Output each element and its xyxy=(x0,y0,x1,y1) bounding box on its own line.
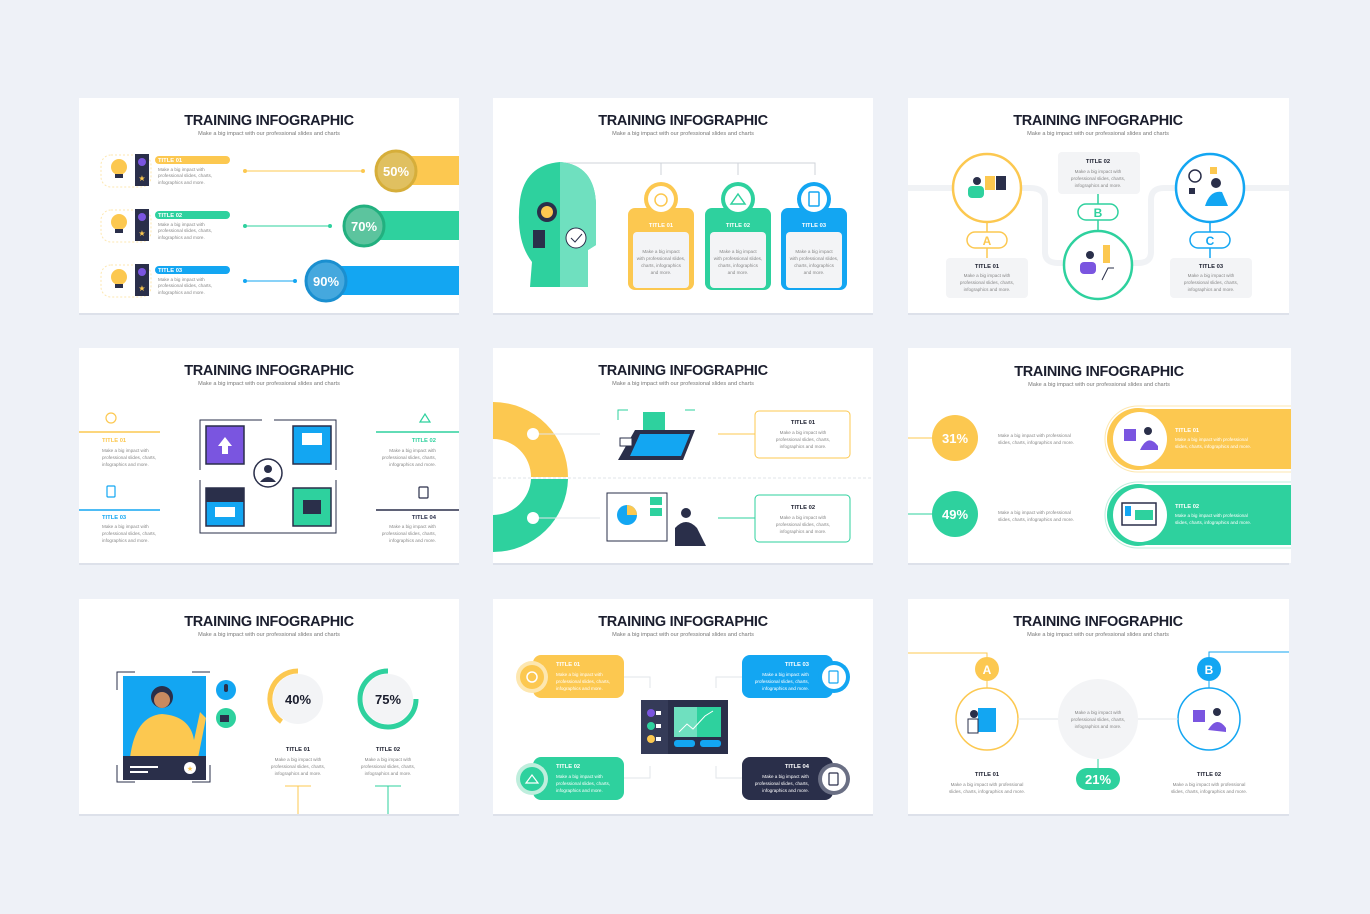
slide 8: four pills around monitor xyxy=(493,599,873,816)
text box 1 xyxy=(718,411,850,458)
title: TRAINING INFOGRAPHIC xyxy=(598,614,769,630)
side B: slides, charts, infographics and more. xyxy=(1171,789,1247,794)
title: Make a big impact with our professional slides and charts xyxy=(612,632,754,638)
center circle: 21% xyxy=(1085,772,1111,787)
title: Make a big impact with our professional slides and charts xyxy=(1028,382,1170,388)
donut 75%: professional slides, charts, xyxy=(361,764,415,769)
row 2: TITLE 02 xyxy=(158,213,182,219)
item 2: TITLE 02 xyxy=(412,438,436,444)
circle A: A xyxy=(983,234,992,248)
circle C xyxy=(1170,154,1252,298)
row 1 xyxy=(908,406,1291,472)
center circle: infographics and more. xyxy=(1075,724,1121,729)
card 3: and more. xyxy=(804,270,824,275)
circle C: Make a big impact with xyxy=(1188,273,1235,278)
card 3: with professional slides, xyxy=(790,256,838,261)
title: TRAINING INFOGRAPHIC xyxy=(1013,113,1184,129)
text box 1: Make a big impact with xyxy=(780,430,827,435)
card 3 xyxy=(781,182,847,290)
title xyxy=(1013,113,1184,137)
pill 1: infographics and more. xyxy=(556,686,603,691)
card 1 xyxy=(628,182,694,290)
pill 3 xyxy=(742,655,850,698)
row 1: Make a big impact with professional xyxy=(1175,437,1248,442)
item 1: professional slides, charts, xyxy=(102,455,156,460)
title: TRAINING INFOGRAPHIC xyxy=(598,363,769,379)
row 2: slides, charts, infographics and more. xyxy=(1175,520,1251,525)
row 2: 70% xyxy=(351,219,377,234)
pill 4: TITLE 04 xyxy=(785,764,810,770)
center circle: professional slides, charts, xyxy=(1071,717,1125,722)
card 2: Make a big impact xyxy=(719,249,757,254)
title: TRAINING INFOGRAPHIC xyxy=(184,614,355,630)
connector lines xyxy=(557,163,815,180)
center squares xyxy=(200,420,336,533)
title: TRAINING INFOGRAPHIC xyxy=(1013,614,1184,630)
side A: Make a big impact with professional xyxy=(951,782,1023,787)
pill 1: Make a big impact with xyxy=(556,672,603,677)
title: TRAINING INFOGRAPHIC xyxy=(184,363,355,379)
title: TRAINING INFOGRAPHIC xyxy=(184,113,355,129)
title: TRAINING INFOGRAPHIC xyxy=(598,113,769,129)
circle A xyxy=(946,154,1028,298)
text box 2 xyxy=(718,495,850,542)
item 1: infographics and more. xyxy=(102,462,149,467)
card 2: with professional slides, xyxy=(714,256,762,261)
circle A: professional slides, charts, xyxy=(960,280,1014,285)
title: Make a big impact with our professional slides and charts xyxy=(1027,131,1169,137)
connector path xyxy=(908,188,1289,263)
circle C: C xyxy=(1206,234,1215,248)
row 3 xyxy=(101,261,459,301)
pill 2: TITLE 02 xyxy=(556,764,580,770)
slide 5: half donut xyxy=(493,348,873,565)
item 4: infographics and more. xyxy=(389,538,436,543)
circle A: Make a big impact with xyxy=(964,273,1011,278)
pill 4 xyxy=(742,757,850,800)
donut 75%: 75% xyxy=(375,692,401,707)
center circle: Make a big impact with xyxy=(1075,710,1122,715)
row 2: 49% xyxy=(942,507,968,522)
slide 9: A B with 21% xyxy=(908,599,1289,816)
text box 1: infographics and more. xyxy=(780,444,826,449)
donut 75%: Make a big impact with xyxy=(365,757,412,762)
card 3: charts, infographics xyxy=(794,263,835,268)
slide 2: head and cards xyxy=(493,98,873,315)
card 3: TITLE 03 xyxy=(802,223,827,229)
item 2: infographics and more. xyxy=(389,462,436,467)
card 2: charts, infographics xyxy=(718,263,759,268)
row 2: TITLE 02 xyxy=(1175,504,1199,510)
slide 6: percent bands xyxy=(908,348,1291,565)
side A: A xyxy=(983,663,992,677)
title xyxy=(184,113,355,137)
row 2: Make a big impact with xyxy=(158,222,205,227)
slide 7: donut progress xyxy=(79,599,459,816)
item 4: professional slides, charts, xyxy=(382,531,436,536)
pill 4: Make a big impact with xyxy=(762,774,809,779)
pill 2: professional slides, charts, xyxy=(556,781,610,786)
text box 1: professional slides, charts, xyxy=(776,437,830,442)
slide 3: A B C circles xyxy=(908,98,1289,315)
row 1 xyxy=(101,151,459,191)
row 2: Make a big impact with professional xyxy=(1175,513,1248,518)
slide 4: four squares xyxy=(79,348,459,565)
row 3: ★ xyxy=(138,284,146,293)
title xyxy=(598,614,769,638)
title xyxy=(1013,614,1184,638)
pill 3: Make a big impact with xyxy=(762,672,809,677)
item 2 xyxy=(376,414,459,467)
pill 3: TITLE 03 xyxy=(785,662,810,668)
pill 3: professional slides, charts, xyxy=(755,679,809,684)
row 1: Make a big impact with professional xyxy=(998,433,1071,438)
row 1: professional slides, charts, xyxy=(158,173,212,178)
row 3: TITLE 03 xyxy=(158,268,183,274)
title: Make a big impact with our professional slides and charts xyxy=(612,381,754,387)
title: Make a big impact with our professional slides and charts xyxy=(198,381,340,387)
donut 40%: 40% xyxy=(285,692,311,707)
pill 3: infographics and more. xyxy=(762,686,809,691)
donut 75%: infographics and more. xyxy=(365,771,411,776)
side B: Make a big impact with professional xyxy=(1173,782,1245,787)
pill 4: infographics and more. xyxy=(762,788,809,793)
row 3: infographics and more. xyxy=(158,290,205,295)
card 1: TITLE 01 xyxy=(649,223,674,229)
center circle xyxy=(1058,679,1138,790)
title: Make a big impact with our professional slides and charts xyxy=(612,131,754,137)
title: Make a big impact with our professional slides and charts xyxy=(198,131,340,137)
side A: TITLE 01 xyxy=(975,772,1000,778)
icon: head xyxy=(519,162,596,287)
row 2: professional slides, charts, xyxy=(158,228,212,233)
row 1: TITLE 01 xyxy=(158,158,183,164)
card 2: TITLE 02 xyxy=(726,223,750,229)
title xyxy=(184,614,355,638)
item 4: TITLE 04 xyxy=(412,515,437,521)
text box 2: TITLE 02 xyxy=(791,505,815,511)
item 4 xyxy=(376,487,459,543)
item 3: professional slides, charts, xyxy=(102,531,156,536)
circle A: infographics and more. xyxy=(964,287,1010,292)
circle B: TITLE 02 xyxy=(1086,159,1110,165)
row 2 xyxy=(908,482,1291,548)
title xyxy=(1014,364,1185,388)
title: Make a big impact with our professional slides and charts xyxy=(1027,632,1169,638)
half donut chart xyxy=(493,402,873,552)
icon: camera xyxy=(216,708,236,728)
row 1: 50% xyxy=(383,164,409,179)
item 2: professional slides, charts, xyxy=(382,455,436,460)
title xyxy=(598,363,769,387)
row 3: Make a big impact with xyxy=(158,277,205,282)
item 1 xyxy=(79,413,160,467)
donut 40%: professional slides, charts, xyxy=(271,764,325,769)
card 1: Make a big impact xyxy=(642,249,680,254)
pill 2: infographics and more. xyxy=(556,788,603,793)
row 2: infographics and more. xyxy=(158,235,205,240)
row 2: slides, charts, infographics and more. xyxy=(998,517,1074,522)
circle B: infographics and more. xyxy=(1075,183,1121,188)
text box 2: professional slides, charts, xyxy=(776,522,830,527)
row 1: Make a big impact with xyxy=(158,167,205,172)
donut 40%: Make a big impact with xyxy=(275,757,322,762)
row 2: Make a big impact with professional xyxy=(998,510,1071,515)
circle C: TITLE 03 xyxy=(1199,264,1224,270)
side B: B xyxy=(1205,663,1214,677)
side A xyxy=(908,653,1058,794)
card 1: and more. xyxy=(651,270,671,275)
pill 2 xyxy=(516,757,624,800)
pill 1: professional slides, charts, xyxy=(556,679,610,684)
donut 40% xyxy=(270,671,325,814)
connector lines xyxy=(623,677,742,778)
side B: TITLE 02 xyxy=(1197,772,1221,778)
donut 75%: TITLE 02 xyxy=(376,747,400,753)
row 3: 90% xyxy=(313,274,339,289)
text box 1: TITLE 01 xyxy=(791,420,816,426)
row 1: slides, charts, infographics and more. xyxy=(1175,444,1251,449)
card 2: and more. xyxy=(728,270,748,275)
pill 4: professional slides, charts, xyxy=(755,781,809,786)
row 1: slides, charts, infographics and more. xyxy=(998,440,1074,445)
circle B xyxy=(1058,152,1140,299)
row 2: ★ xyxy=(138,229,146,238)
pill 2: Make a big impact with xyxy=(556,774,603,779)
photo frame xyxy=(117,672,210,782)
card 1: charts, infographics xyxy=(641,263,682,268)
title: Make a big impact with our professional slides and charts xyxy=(198,632,340,638)
donut 40%: infographics and more. xyxy=(275,771,321,776)
card 1: with professional slides, xyxy=(637,256,685,261)
circle B: professional slides, charts, xyxy=(1071,176,1125,181)
text box 2: infographics and more. xyxy=(780,529,826,534)
icon: mic xyxy=(216,680,236,700)
item 3: TITLE 03 xyxy=(102,515,127,521)
row 2 xyxy=(101,206,459,246)
side B xyxy=(1138,652,1289,794)
slide 1: percentage bars xyxy=(79,98,459,315)
pill 1: TITLE 01 xyxy=(556,662,581,668)
circle B: Make a big impact with xyxy=(1075,169,1122,174)
title xyxy=(598,113,769,137)
title xyxy=(184,363,355,387)
row 1: ★ xyxy=(138,174,146,183)
photo frame: ★ xyxy=(187,765,193,773)
card 2 xyxy=(705,182,771,290)
monitor xyxy=(641,700,728,754)
circle B: B xyxy=(1094,206,1103,220)
item 4: Make a big impact with xyxy=(389,524,436,529)
item 2: Make a big impact with xyxy=(389,448,436,453)
illustration: laptop xyxy=(618,410,695,460)
circle C: infographics and more. xyxy=(1188,287,1234,292)
card 3: Make a big impact xyxy=(795,249,833,254)
item 1: Make a big impact with xyxy=(102,448,149,453)
circle A: TITLE 01 xyxy=(975,264,1000,270)
item 3: infographics and more. xyxy=(102,538,149,543)
row 1: 31% xyxy=(942,431,968,446)
row 1: infographics and more. xyxy=(158,180,205,185)
row 3: professional slides, charts, xyxy=(158,283,212,288)
item 3 xyxy=(79,486,160,543)
item 1: TITLE 01 xyxy=(102,438,127,444)
row 1: TITLE 01 xyxy=(1175,428,1200,434)
item 3: Make a big impact with xyxy=(102,524,149,529)
pill 1 xyxy=(516,655,624,698)
circle C: professional slides, charts, xyxy=(1184,280,1238,285)
donut 40%: TITLE 01 xyxy=(286,747,311,753)
illustration: presenter xyxy=(607,493,706,546)
title: TRAINING INFOGRAPHIC xyxy=(1014,364,1185,380)
side A: slides, charts, infographics and more. xyxy=(949,789,1025,794)
donut 75% xyxy=(360,671,416,814)
text box 2: Make a big impact with xyxy=(780,515,827,520)
